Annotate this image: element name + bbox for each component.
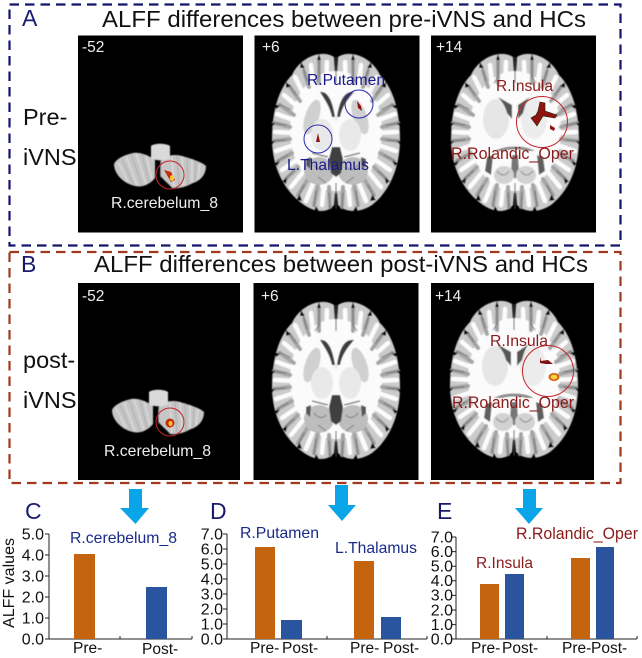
bar: putamen Post: [281, 620, 302, 639]
chart label: R.Putamen: R.Putamen: [240, 525, 319, 542]
arrow: to chart D: [328, 485, 356, 521]
chart D: putamen and thalamus ALFF: Post-: [383, 640, 419, 657]
chart E: insula and rolandic operculum ALFF: 5.0: [431, 558, 453, 576]
chart D: putamen and thalamus ALFF: 1.0: [201, 616, 223, 634]
chart D: putamen and thalamus ALFF: [201, 498, 427, 657]
chart C: R.cerebelum_8 ALFF: 0.0: [22, 632, 44, 648]
brain slice: -52 cerebellum: R.cerebelum_8: [104, 443, 211, 460]
brain slice: +14 insula and rolandic operculum: R.Rolandic_Oper: [451, 145, 574, 163]
bar: Post: [146, 587, 167, 639]
chart label: R.cerebelum_8: R.cerebelum_8: [70, 530, 177, 547]
chart D: putamen and thalamus ALFF: 5.0: [201, 556, 223, 574]
brain slice: +6 putamen and thalamus: L.Thalamus: [287, 157, 369, 174]
brain slice: -52 cerebellum: [78, 36, 243, 232]
chart C: R.cerebelum_8 ALFF: 2.0: [22, 590, 44, 606]
bar: rolandic Post: [596, 547, 614, 639]
axis title: ALFF values: ALFF values: [1, 538, 18, 628]
brain slice: +6 no findings: [254, 283, 418, 480]
chart E: insula and rolandic operculum ALFF: 0.0: [431, 632, 453, 648]
bar: Pre: [74, 554, 95, 639]
bar: insula Post: [505, 574, 524, 639]
chart label: R.Rolandic_Oper: R.Rolandic_Oper: [516, 525, 638, 543]
bar: putamen Pre: [255, 547, 275, 639]
row label: post-iVNS: iVNS: [23, 387, 77, 413]
brain slice: +14 insula and rolandic operculum: R.Insula: [490, 333, 548, 350]
chart E: insula and rolandic operculum ALFF: Pre-: [471, 640, 500, 657]
chart D: putamen and thalamus ALFF: 6.0: [201, 542, 223, 558]
arrow: to chart E: [515, 489, 543, 524]
brain slice: +6 putamen and thalamus: R.Putamen: [307, 72, 385, 89]
bar: thalamus Post: [381, 617, 401, 639]
chart D: putamen and thalamus ALFF: 0.0: [201, 632, 223, 648]
brain slice: +14 insula and rolandic operculum: +14: [435, 288, 462, 305]
row label: Pre-iVNS: Pre-: [23, 104, 67, 130]
brain slice: +14 insula and rolandic operculum: [431, 36, 596, 232]
heading: panel letter E: E: [437, 498, 452, 524]
brain slice: -52 cerebellum: R.cerebelum_8: [111, 195, 218, 212]
brain slice: -52 cerebellum: [78, 283, 240, 480]
heading: panel letter C: C: [25, 498, 42, 524]
chart E: insula and rolandic operculum ALFF: [431, 498, 638, 657]
bar: thalamus Pre: [354, 561, 374, 639]
chart D: putamen and thalamus ALFF: Post-: [282, 640, 318, 657]
brain slice: +14 insula and rolandic operculum: R.Insula: [496, 78, 553, 95]
brain slice: +6 putamen and thalamus: +6: [262, 39, 280, 56]
chart E: insula and rolandic operculum ALFF: 6.0: [431, 544, 453, 561]
chart C: R.cerebelum_8 ALFF: 5.0: [22, 526, 44, 544]
chart C: R.cerebelum_8 ALFF: 4.0: [22, 548, 44, 564]
chart label: R.Insula: R.Insula: [476, 555, 533, 572]
bar: insula Pre: [480, 584, 499, 639]
heading: panel letter A: A: [22, 5, 38, 31]
chart D: putamen and thalamus ALFF: Pre-: [350, 640, 379, 657]
row label: post-iVNS: post-: [23, 347, 75, 373]
chart C: R.cerebelum_8 ALFF: 3.0: [22, 568, 44, 586]
heading: panel letter B: B: [21, 251, 36, 277]
chart E: insula and rolandic operculum ALFF: 1.0: [431, 617, 453, 634]
brain slice: +14 insula and rolandic operculum: +14: [436, 39, 463, 56]
brain slice: +14 insula and rolandic operculum: [431, 283, 594, 480]
chart C: R.cerebelum_8 ALFF: Post-: [142, 641, 178, 658]
bar: rolandic Pre: [571, 558, 590, 639]
arrow: to chart C: [120, 489, 149, 524]
chart D: putamen and thalamus ALFF: 2.0: [201, 602, 223, 618]
chart label: L.Thalamus: L.Thalamus: [335, 540, 417, 557]
brain slice: +14 insula and rolandic operculum: R.Rolandic_Oper: [452, 394, 574, 412]
brain slice: -52 cerebellum: -52: [82, 288, 104, 305]
panel A: pre-iVNS group: [10, 4, 620, 246]
chart D: putamen and thalamus ALFF: 7.0: [201, 526, 223, 544]
brain slice: -52 cerebellum: -52: [82, 39, 104, 56]
chart C: R.cerebelum_8 ALFF: 1.0: [22, 610, 44, 628]
chart D: putamen and thalamus ALFF: 3.0: [201, 586, 223, 604]
brain slice: +6 putamen and thalamus: [254, 36, 420, 232]
chart E: insula and rolandic operculum ALFF: Post-: [502, 640, 538, 657]
chart E: insula and rolandic operculum ALFF: 3.0: [431, 588, 453, 604]
chart C: R.cerebelum_8 ALFF: Pre-: [73, 640, 102, 657]
heading: panel letter D: D: [210, 498, 227, 524]
chart E: insula and rolandic operculum ALFF: 4.0: [431, 573, 453, 590]
chart D: putamen and thalamus ALFF: 4.0: [201, 572, 223, 588]
brain slice: +6 no findings: +6: [261, 288, 279, 305]
chart E: insula and rolandic operculum ALFF: 2.0: [431, 602, 453, 620]
chart E: insula and rolandic operculum ALFF: 7.0: [431, 530, 453, 546]
chart E: insula and rolandic operculum ALFF: Post-: [591, 640, 627, 657]
chart C: R.cerebelum_8 ALFF: [1, 498, 192, 658]
title: panel B: ALFF differences between post-iVNS and HCs: [94, 251, 588, 277]
row label: Pre-iVNS: iVNS: [23, 144, 77, 170]
panel B: post-iVNS group: [10, 251, 620, 483]
chart D: putamen and thalamus ALFF: Pre-: [250, 640, 279, 657]
chart E: insula and rolandic operculum ALFF: Pre-: [562, 640, 591, 657]
title: panel A: ALFF differences between pre-iVNS and HCs: [102, 6, 586, 32]
